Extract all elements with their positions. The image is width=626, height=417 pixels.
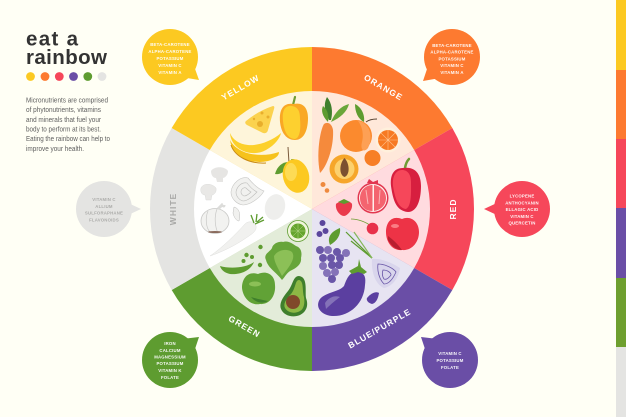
icon: yellow pepper xyxy=(280,97,308,140)
bubble: green: IRON xyxy=(164,341,176,346)
bubble: red xyxy=(484,181,550,237)
bubble: white: VITAMIN C xyxy=(92,197,116,202)
right colour sidebar xyxy=(616,0,626,417)
bubble: orange: POTASSIUM xyxy=(438,56,466,61)
bubble: green: POTASSIUM xyxy=(156,361,184,366)
bubble: purple: VITAMIN C xyxy=(438,351,462,356)
icon: mushrooms xyxy=(201,167,228,200)
icon: lemon xyxy=(275,147,313,196)
icon: small fruits xyxy=(320,182,329,193)
bubble: purple: POTASSIUM xyxy=(436,358,464,363)
bubble: green xyxy=(142,332,199,388)
icon: pomegranate xyxy=(358,179,388,214)
icon: white radish xyxy=(210,214,264,256)
bubble: white: FLAVONOIDS xyxy=(89,217,119,222)
bubble: white xyxy=(76,181,141,237)
bubble: white: ALLIUM xyxy=(95,204,113,209)
segment labels: BLUE/PURPLE xyxy=(346,306,413,350)
icon: cherry xyxy=(351,219,378,234)
intro text: of phytonutrients, vitamins xyxy=(26,107,102,114)
bubble: green: MAGNESSIUM xyxy=(154,354,186,360)
icon: orange fruit xyxy=(340,104,377,152)
icon: peach xyxy=(330,154,358,184)
icon: red onion xyxy=(372,259,400,288)
intro text: Micronutrients are comprised xyxy=(26,98,108,104)
title: rainbow xyxy=(26,46,107,69)
bubble: green: FOLATE xyxy=(161,375,179,380)
icon: bananas xyxy=(230,133,281,163)
colour dots legend xyxy=(26,72,106,81)
icon: spring onion stalk xyxy=(346,232,372,258)
bubble: yellow: VITAMIN C xyxy=(158,63,182,68)
icon: garlic clove xyxy=(233,207,240,221)
icon: eggplant slice xyxy=(367,292,379,304)
bubble: red: QUERCETIN xyxy=(508,220,536,226)
bubble: red: VITAMIN C xyxy=(510,214,534,219)
intro text xyxy=(26,98,110,153)
segment labels: WHITE xyxy=(168,193,178,225)
title xyxy=(26,28,107,69)
bubble: yellow: POTASSIUM xyxy=(156,56,184,61)
icon: blueberries and grapes xyxy=(316,220,350,283)
bubble: orange xyxy=(423,29,480,85)
segment labels: ORANGE xyxy=(362,72,405,103)
intro text: Eating the rainbow can help to xyxy=(26,136,110,143)
icon: carrot xyxy=(318,97,349,173)
bubble: orange: VITAMIN C xyxy=(440,63,464,68)
icon: green apple xyxy=(242,273,275,304)
bubble: purple xyxy=(421,332,478,388)
bubble: orange: BETA-CAROTENE xyxy=(432,43,472,48)
icon: garlic xyxy=(201,205,229,234)
icon: avocado xyxy=(280,276,307,316)
bubble: yellow: BETA-CAROTENE xyxy=(150,42,190,47)
segment labels: GREEN xyxy=(227,313,262,340)
bubble: red: ANTHOCYANIN xyxy=(505,200,539,206)
icon: cheese xyxy=(245,106,274,133)
bubble: yellow: ALPHA-CAROTENE xyxy=(148,49,192,54)
wheel: inner pale plate xyxy=(194,91,430,327)
bubble: green: CALCIUM xyxy=(159,348,181,353)
bubble: yellow: VITAMIN A xyxy=(158,70,182,75)
bubble: orange: VITAMIN A xyxy=(440,70,464,75)
bubble: yellow xyxy=(142,29,199,85)
wheel: outer ring xyxy=(150,47,474,371)
bubble: white: SULFORAPHANE xyxy=(85,211,123,216)
bubble: purple: FOLATE xyxy=(441,365,459,370)
icon: eggplant xyxy=(318,259,367,316)
title: eat a xyxy=(26,28,79,50)
bubble: green: VITAMIN K xyxy=(158,368,182,373)
icon: potato xyxy=(262,192,288,222)
bubble: orange: ALPHA-CAROTENE xyxy=(430,50,474,54)
segment labels: RED xyxy=(448,199,458,219)
icon: lettuce xyxy=(265,241,301,280)
icon: red apple xyxy=(386,218,419,250)
icon: white onion xyxy=(231,178,264,205)
icon: small orange xyxy=(364,150,380,166)
icon: lime xyxy=(288,220,308,242)
icon: red bell pepper xyxy=(391,159,421,212)
segment labels xyxy=(168,72,458,350)
intro text: improve your health. xyxy=(26,146,84,153)
icon: orange slice xyxy=(376,128,400,152)
bubble: red: ELLAGIC ACID xyxy=(506,207,538,212)
intro text: and minerals that fuel your xyxy=(26,117,102,124)
segment labels: YELLOW xyxy=(220,72,261,102)
icon: peas and pod xyxy=(220,245,263,274)
intro text: body to perform at its best. xyxy=(26,126,101,134)
icon: strawberry xyxy=(336,199,352,216)
bubble: red: LYCOPENE xyxy=(510,194,534,198)
